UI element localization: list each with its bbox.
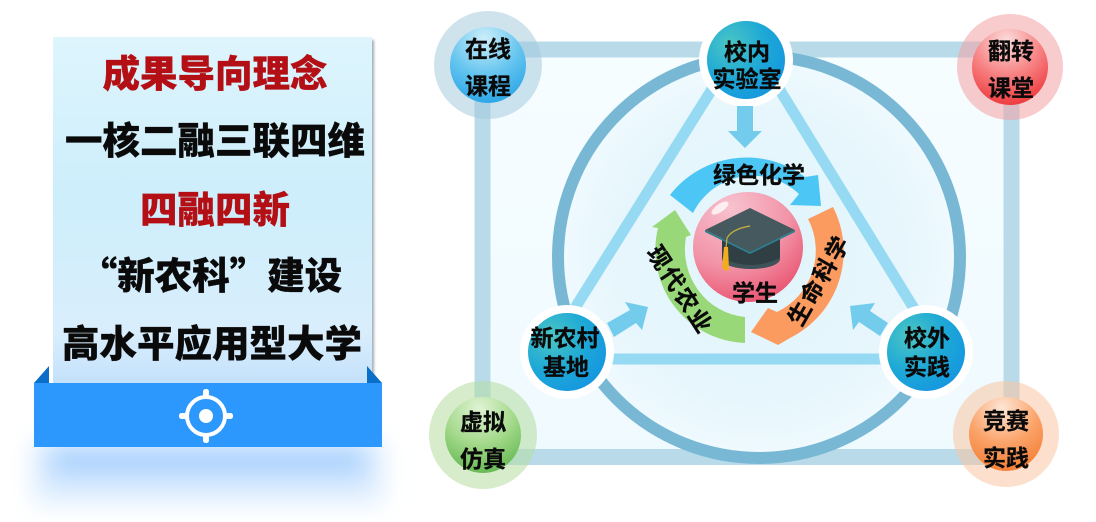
heading: four integrations: 四融四新 (140, 189, 290, 231)
panel shadow (56, 40, 374, 384)
large circle (558, 56, 960, 458)
node: flipped classroom (957, 14, 1063, 120)
text: one core: 一核二融三联四维 (65, 120, 365, 162)
diagram: square frame, circle and triangle (482, 35, 1012, 458)
center sphere: student: 学生 (732, 280, 778, 306)
node: virtual simulation: 虚拟 (460, 409, 506, 435)
arrow: from campus lab (728, 106, 762, 148)
center sphere: student (693, 192, 803, 306)
cycle arrow: green chemistry (670, 157, 821, 213)
node: rural base: 新农村 (530, 325, 600, 351)
node: online course (434, 11, 542, 119)
node: off-campus practice: 校外 (904, 325, 950, 351)
node: rural base: 基地 (543, 354, 589, 380)
heading: outcome-based concept: 成果导向理念 (102, 53, 328, 95)
cycle arrow: modern agriculture (642, 210, 745, 343)
base glow (34, 440, 382, 502)
node: online course: 课程 (465, 73, 511, 99)
node: off-campus practice (879, 305, 973, 399)
node: flipped classroom: 课堂 (988, 75, 1034, 101)
node: competition practice (953, 381, 1059, 487)
square interior (482, 50, 1012, 457)
cycle arrow: green chemistry: 绿色化学 (713, 162, 805, 188)
icon: target (179, 389, 233, 443)
cycle arrow: modern agriculture: 现代农业 (642, 241, 718, 339)
panel: left summary card (34, 37, 382, 502)
node: rural base (520, 305, 614, 399)
node: virtual simulation (429, 381, 537, 489)
node: competition practice: 实践 (983, 445, 1029, 471)
square frame bands (482, 50, 1012, 457)
blue base bar (34, 383, 382, 447)
arrow: from off-campus practice (850, 303, 888, 336)
triangle (543, 35, 945, 359)
card background (53, 37, 372, 384)
node: campus lab: 校内 (724, 39, 770, 65)
icon: graduation cap (705, 208, 795, 271)
right fold (367, 366, 382, 383)
cycle arrow: life science: 生命科学 (783, 231, 855, 330)
node: online course: 在线 (465, 36, 511, 62)
node: campus lab (699, 13, 793, 107)
node: flipped classroom: 翻转 (988, 38, 1034, 64)
text: new agriculture: “新农科”建设 (80, 245, 342, 300)
cycle arrow: life science (751, 207, 855, 345)
text: applied university: 高水平应用型大学 (62, 323, 362, 365)
node: competition practice: 竞赛 (983, 408, 1029, 434)
node: off-campus practice: 实践 (904, 354, 950, 380)
left fold (34, 366, 49, 383)
arrow: from rural base (607, 302, 648, 337)
node: virtual simulation: 仿真 (460, 446, 506, 472)
node: campus lab: 实验室 (712, 66, 782, 92)
